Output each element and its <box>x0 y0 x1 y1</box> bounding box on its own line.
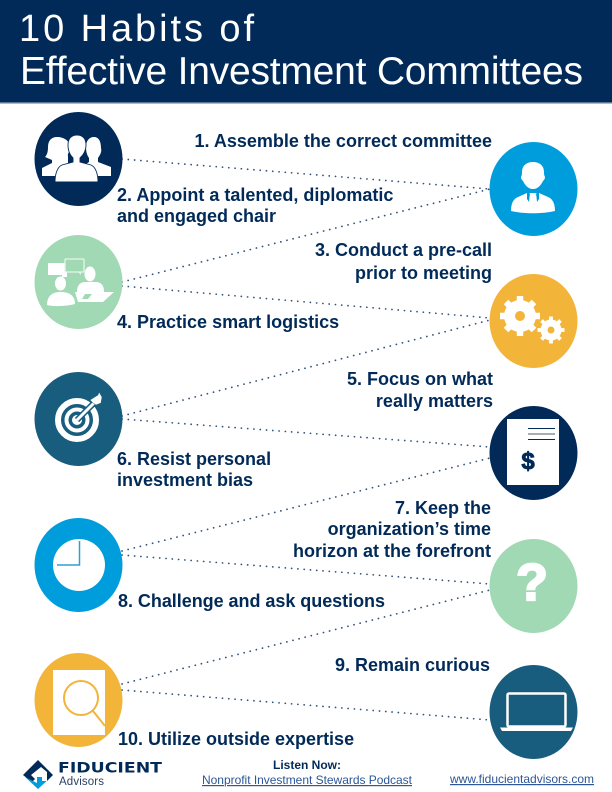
title: 10 Habits of <box>19 8 254 50</box>
habit 6: investment bias <box>117 470 253 490</box>
habit 2: and engaged chair <box>117 206 276 226</box>
icon: clock <box>34 518 122 612</box>
icon: gears <box>490 274 578 368</box>
habit 10: 10. Utilize outside expertise <box>118 729 354 749</box>
title <box>19 8 583 93</box>
header banner <box>0 0 612 104</box>
icon: target <box>34 372 122 466</box>
icon: financial document: $ <box>521 448 535 475</box>
icon: financial document <box>490 406 578 500</box>
habit 1: 1. Assemble the correct committee <box>195 131 492 151</box>
logo: Fiducient Advisors: Advisors <box>59 776 104 788</box>
habit 6: 6. Resist personal <box>117 449 271 469</box>
icon: laptop <box>490 665 578 759</box>
website link: www.fiducientadvisors.com <box>449 772 594 786</box>
icon: meeting <box>34 235 122 329</box>
icon: executive <box>490 142 578 236</box>
logo: Fiducient Advisors <box>23 760 162 789</box>
habit 2: 2. Appoint a talented, diplomatic <box>117 185 393 205</box>
habit 4: 4. Practice smart logistics <box>117 312 339 332</box>
dotted connector lines <box>122 159 490 720</box>
habit 9: 9. Remain curious <box>335 655 490 675</box>
icon: question mark: ? <box>516 554 548 612</box>
habit 7: 7. Keep the <box>395 498 491 518</box>
icon: committee group <box>34 112 122 206</box>
habit 3: 3. Conduct a pre-call <box>315 240 492 260</box>
habit 7: organization’s time <box>328 519 491 539</box>
podcast link: Listen Now: <box>273 758 341 772</box>
logo: Fiducient Advisors: FIDUCIENT <box>58 760 162 776</box>
habit 7: horizon at the forefront <box>293 541 491 561</box>
icon: question mark <box>490 539 578 633</box>
habit 5: 5. Focus on what <box>347 369 493 389</box>
podcast link <box>202 758 413 787</box>
habit 8: 8. Challenge and ask questions <box>118 591 385 611</box>
title: Effective Investment Committees <box>20 50 583 93</box>
habit 3: prior to meeting <box>355 263 492 283</box>
icon: magnifier on document <box>34 653 122 747</box>
podcast link: Nonprofit Investment Stewards Podcast <box>202 773 413 787</box>
habit 5: really matters <box>376 391 493 411</box>
